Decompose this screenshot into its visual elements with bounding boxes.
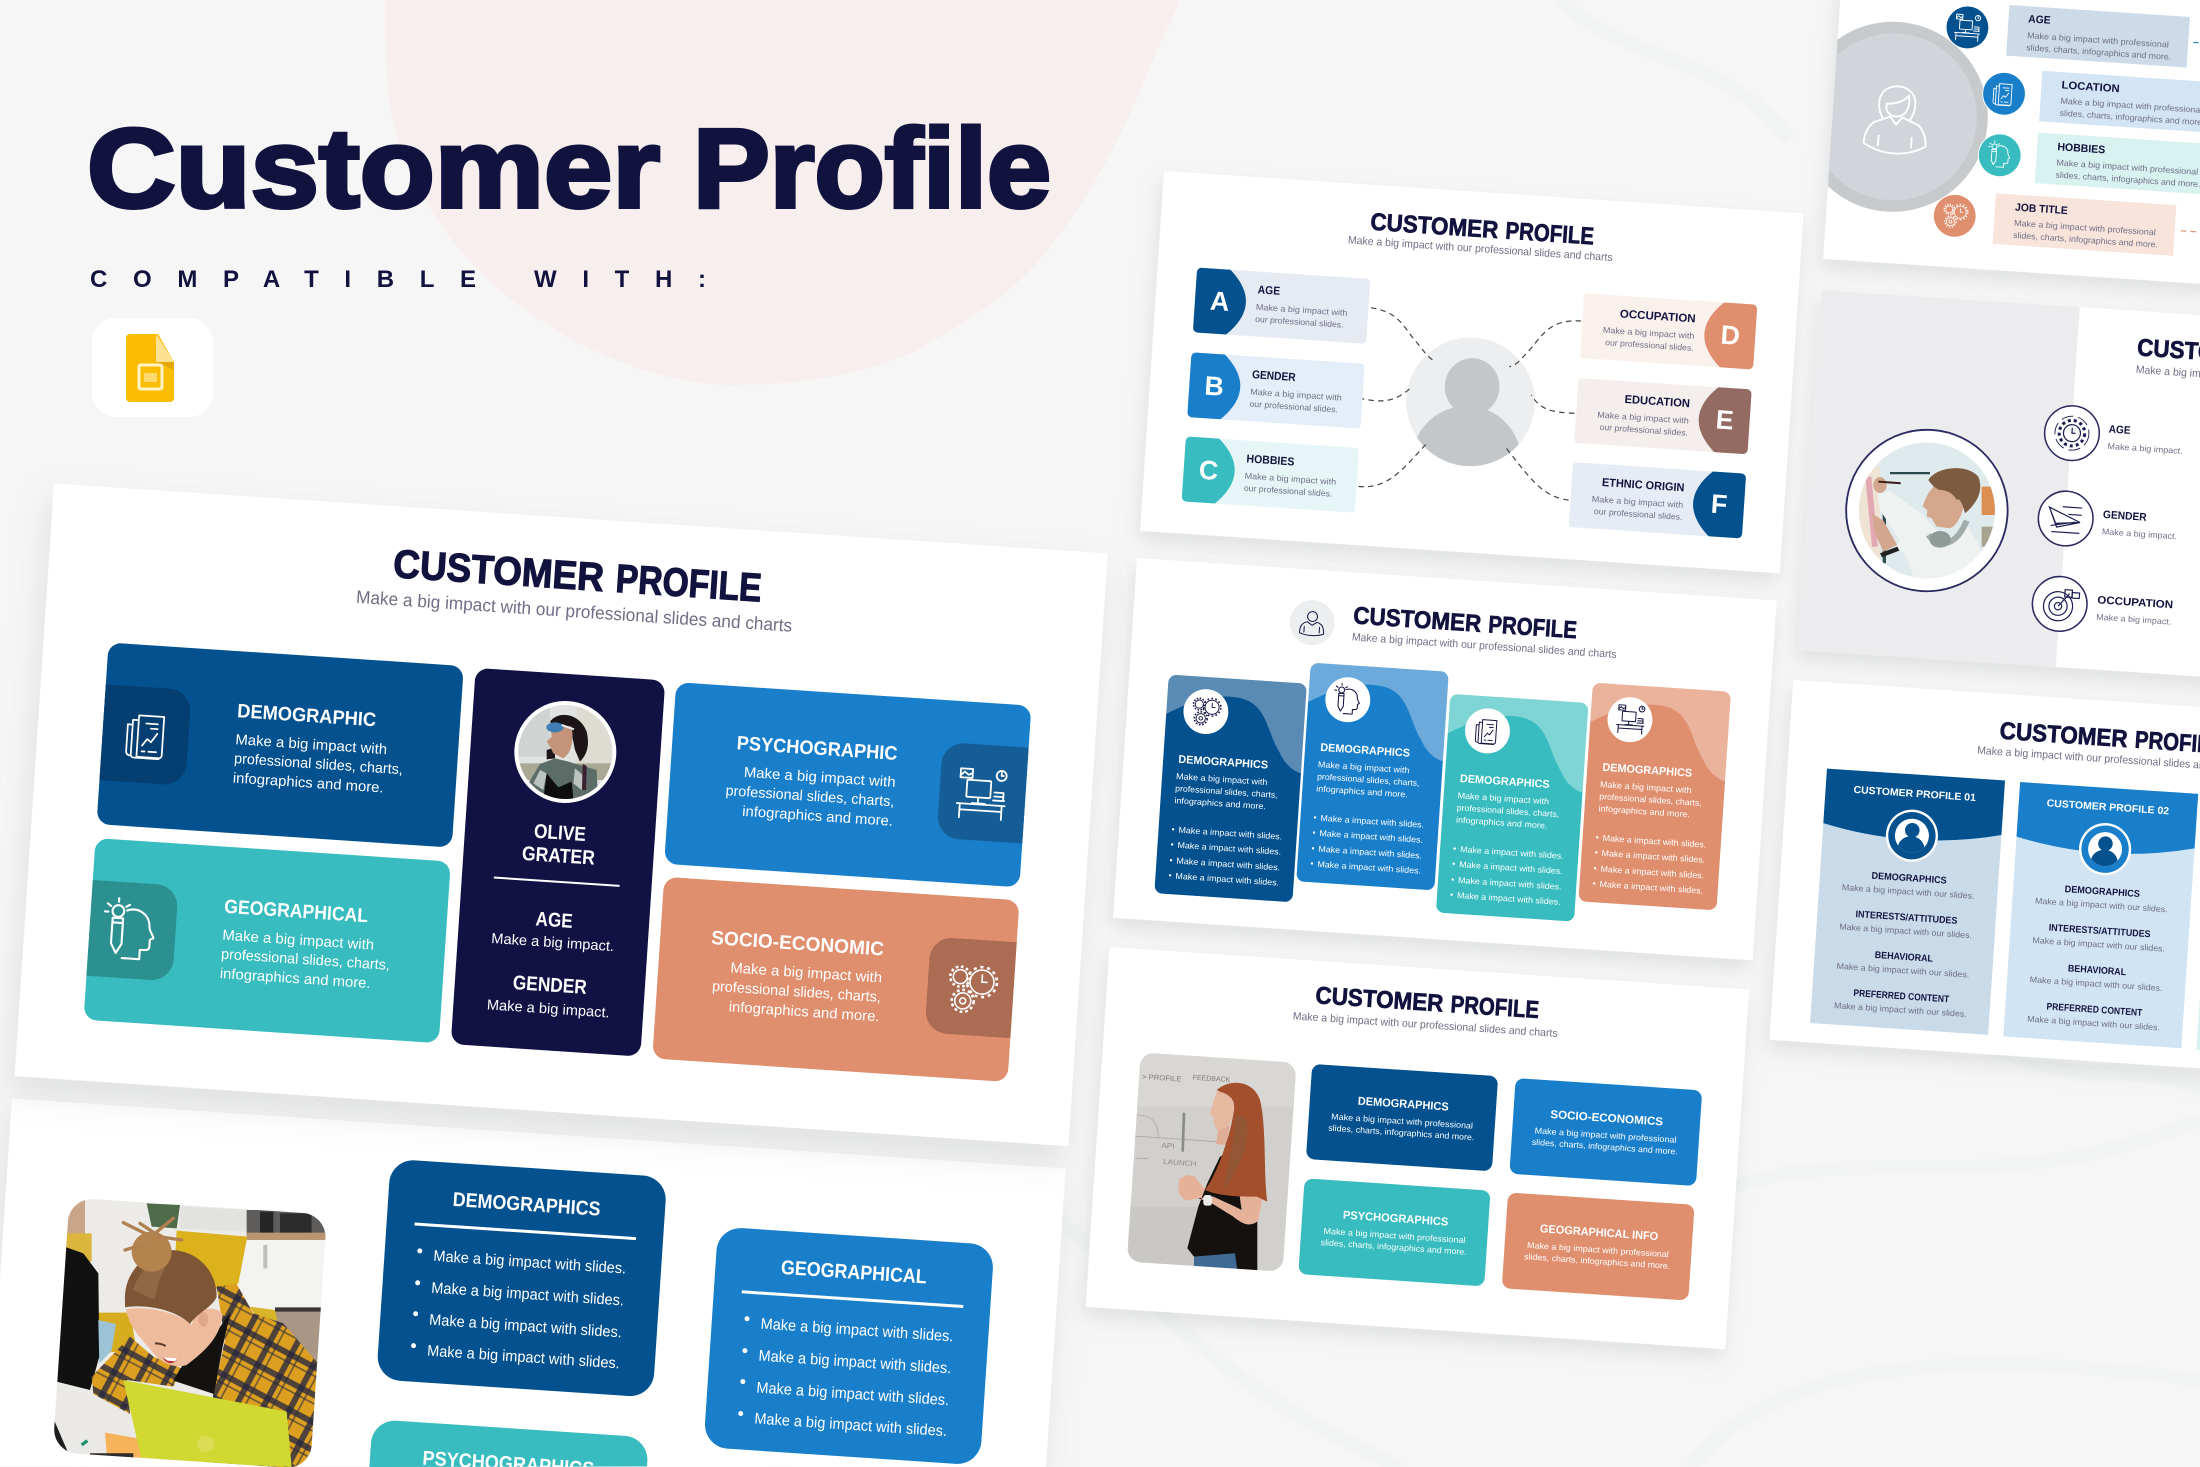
column 2: Make a impact with slides. xyxy=(1320,813,1424,830)
item F: our professional slides. xyxy=(1594,506,1683,522)
card: geographical: Make a big impact with xyxy=(222,928,375,954)
item: hobbies: HOBBIES xyxy=(2057,141,2106,156)
icon: header person xyxy=(1288,599,1336,646)
column 1: Make a impact with slides. xyxy=(1175,871,1279,888)
item F xyxy=(1569,462,1746,538)
column 3 xyxy=(1436,694,1588,922)
item B: B xyxy=(1204,371,1225,402)
card: psychographics: slides, charts, infographics and more. xyxy=(1320,1237,1467,1257)
column 4: Make a impact with slides. xyxy=(1601,848,1706,865)
item B xyxy=(1187,352,1365,429)
card: psychographics: PSYCHOGRAPHICS xyxy=(1343,1210,1449,1229)
card: persona Olive Grater: AGE xyxy=(535,908,573,933)
profile card 02: PREFERRED CONTENT xyxy=(2046,1002,2143,1019)
dashed connectors xyxy=(2181,42,2200,233)
item: job title: JOB TITLE xyxy=(2015,202,2068,217)
column 4: Make a impact with slides. xyxy=(1602,833,1707,850)
column 3: Make a impact with slides. xyxy=(1458,875,1562,892)
panel: slide 7 split with photo xyxy=(1798,290,2200,692)
profile card 03 xyxy=(2196,795,2200,1062)
card: psychographics xyxy=(1298,1178,1491,1286)
column 2: Make a impact with slides. xyxy=(1317,859,1421,876)
profile card 02: DEMOGRAPHICS xyxy=(2064,884,2141,900)
heading: PROFILE xyxy=(1488,611,1578,644)
card: geographical: infographics and more. xyxy=(219,966,371,992)
item D: OCCUPATION xyxy=(1619,308,1696,325)
item: occupation: Make a big impact. xyxy=(2096,612,2172,627)
card: demographic: Make a big impact with xyxy=(235,732,388,758)
column 1: Make a impact with slides. xyxy=(1178,825,1282,842)
profile card 01: Make a big impact with our slides. xyxy=(1834,1000,1967,1019)
column 4: professional slides, charts, xyxy=(1599,791,1702,808)
card: psychographics xyxy=(369,1419,649,1467)
item F: Make a big impact with xyxy=(1591,494,1684,510)
card: geographical info xyxy=(1502,1192,1695,1301)
compatible with label: COMPATIBLE WITH: xyxy=(90,266,706,293)
item: location: slides, charts, infographics and more. xyxy=(2059,108,2200,127)
column 2 xyxy=(1296,663,1449,890)
item: gender: Make a big impact. xyxy=(2102,526,2177,541)
column 3: infographics and more. xyxy=(1456,815,1548,831)
profile card 02: Make a big impact with our slides. xyxy=(2035,896,2168,914)
card: persona Olive Grater: Make a big impact. xyxy=(486,997,610,1021)
card: socio-economics: Make a big impact with professional xyxy=(1534,1125,1677,1145)
column 1: DEMOGRAPHICS xyxy=(1178,754,1269,772)
item E: EDUCATION xyxy=(1624,394,1690,410)
column 2: Make a impact with slides. xyxy=(1319,828,1423,845)
card: socio-economics: slides, charts, infographics and more. xyxy=(1531,1137,1678,1156)
item: location xyxy=(1981,67,2200,134)
item: age: AGE xyxy=(2108,424,2131,437)
profile card 02: Make a big impact with our slides. xyxy=(2030,974,2163,993)
column 3: Make a impact with slides. xyxy=(1459,859,1563,876)
column 2: infographics and more. xyxy=(1316,783,1408,799)
card: demographic xyxy=(97,642,464,848)
heading: CUSTOMER xyxy=(1370,209,1500,244)
card: geographical: Make a big impact with slides. xyxy=(756,1379,950,1409)
subtitle: Make a big impact with our professional slides and charts xyxy=(1352,631,1618,661)
profile card 01: PREFERRED CONTENT xyxy=(1853,988,1950,1005)
column 4: DEMOGRAPHICS xyxy=(1602,762,1693,780)
heading xyxy=(1352,602,1578,644)
item: job title: slides, charts, infographics and more. xyxy=(2013,230,2158,250)
profile card 01: Make a big impact with our slides. xyxy=(1842,882,1975,901)
panel: slide 5 demographics bullets xyxy=(0,1098,1066,1467)
photo: portrait xyxy=(518,705,612,799)
card: psychographic: PSYCHOGRAPHIC xyxy=(736,732,898,765)
profile card 01: Make a big impact with our slides. xyxy=(1839,921,1972,940)
card: demographics: DEMOGRAPHICS xyxy=(1357,1096,1449,1114)
card: demographics: Make a big impact with professional xyxy=(1331,1111,1473,1131)
card: psychographic xyxy=(664,682,1031,887)
background swirl lines xyxy=(1040,0,2200,1467)
item C xyxy=(1182,436,1359,513)
profile card 01: CUSTOMER PROFILE 01 xyxy=(1853,785,1976,804)
item: job title: Make a big impact with professional xyxy=(2014,218,2156,237)
card: demographics: Make a big impact with slides. xyxy=(433,1248,627,1278)
column 3: Make a impact with slides. xyxy=(1457,890,1561,907)
card: persona Olive Grater: OLIVE xyxy=(533,821,587,846)
photo: woman with laptop xyxy=(54,1199,326,1467)
item A: A xyxy=(1209,286,1230,317)
card: geographical xyxy=(84,838,451,1043)
item E: E xyxy=(1715,404,1735,436)
item B: our professional slides. xyxy=(1249,399,1338,414)
column 1 xyxy=(1154,674,1307,902)
card: geographical info: GEOGRAPHICAL INFO xyxy=(1540,1223,1659,1243)
card: persona Olive Grater xyxy=(451,668,665,1057)
item: age: Make a big impact. xyxy=(2107,441,2183,456)
item: age: Make a big impact with professional xyxy=(2027,30,2169,50)
icon: google slides xyxy=(92,318,213,417)
item C: our professional slides. xyxy=(1244,483,1333,499)
heading: CUSTOMER xyxy=(1999,718,2129,753)
card: socio-economic xyxy=(652,877,1019,1082)
card: socio-economic: Make a big impact with xyxy=(730,960,883,986)
column 2: DEMOGRAPHICS xyxy=(1320,742,1411,760)
chart: central person xyxy=(1406,338,1535,466)
heading xyxy=(1999,718,2200,760)
profile card 02: BEHAVIORAL xyxy=(2068,963,2127,978)
connector lines xyxy=(1349,306,1591,501)
card: geographical: professional slides, charts, xyxy=(221,947,390,974)
subtitle: Make a big impact with our professional slides and charts xyxy=(355,587,793,636)
background pink blob xyxy=(385,0,1180,385)
card: geographical: GEOGRAPHICAL xyxy=(780,1257,927,1288)
card: socio-economics: SOCIO-ECONOMICS xyxy=(1550,1109,1664,1129)
item B: GENDER xyxy=(1252,369,1297,384)
card: demographics xyxy=(376,1159,667,1398)
chart: big person circle xyxy=(1828,22,1988,212)
card: geographical: Make a big impact with slides. xyxy=(760,1316,954,1345)
column 4 xyxy=(1578,683,1731,910)
card: demographic: DEMOGRAPHIC xyxy=(237,700,377,731)
item: occupation xyxy=(2031,575,2175,639)
item E: Make a big impact with xyxy=(1597,410,1689,426)
photo: woman at whiteboard: API xyxy=(1161,1141,1175,1151)
card: demographics: Make a big impact with slides. xyxy=(429,1312,622,1341)
panel: slide 2 A to F xyxy=(1140,171,1804,573)
heading xyxy=(1315,982,1540,1024)
card: socio-economic: professional slides, charts, xyxy=(712,979,881,1006)
column 1: Make a impact with slides. xyxy=(1177,840,1281,857)
column 4: Make a big impact with xyxy=(1600,779,1692,795)
column 2: Make a big impact with xyxy=(1318,759,1410,775)
panel: slide 1 main customer profile xyxy=(15,484,1108,1146)
panel: slide 6 top right radial list xyxy=(1788,0,2200,301)
card: geographical: GEOGRAPHICAL xyxy=(224,896,369,927)
heading: CUSTOMER xyxy=(1352,602,1482,638)
profile card 02: CUSTOMER PROFILE 02 xyxy=(2046,798,2170,817)
item E xyxy=(1574,378,1752,454)
card: socio-economics xyxy=(1509,1078,1702,1186)
column 1: professional slides, charts, xyxy=(1175,783,1278,800)
profile card 01 xyxy=(1810,769,2005,1035)
heading: CUSTOMER xyxy=(392,542,605,600)
item: occupation: OCCUPATION xyxy=(2097,594,2174,611)
item: gender: GENDER xyxy=(2103,509,2147,524)
item A: Make a big impact with xyxy=(1256,302,1348,318)
column 1: Make a impact with slides. xyxy=(1176,856,1280,872)
panel: slide 4 photo and four cards xyxy=(1086,947,1749,1349)
profile card 01: DEMOGRAPHICS xyxy=(1871,871,1947,887)
column 4: Make a impact with slides. xyxy=(1599,879,1703,896)
item D: Make a big impact with xyxy=(1603,325,1695,341)
photo: woman at whiteboard: LAUNCH xyxy=(1163,1157,1197,1168)
column 3: Make a big impact with xyxy=(1457,790,1550,806)
card: socio-economic: infographics and more. xyxy=(728,999,880,1025)
card: demographics: Make a big impact with slides. xyxy=(427,1343,620,1372)
item F: ETHNIC ORIGIN xyxy=(1602,477,1685,494)
panel: slide 8 profile comparison xyxy=(1769,680,2200,1082)
column 2: professional slides, charts, xyxy=(1317,771,1420,788)
item: gender xyxy=(2037,489,2180,553)
heading: PROFILE xyxy=(1450,991,1540,1024)
item A: AGE xyxy=(1257,284,1281,298)
photo: woman at whiteboard: > PROFILE xyxy=(1142,1072,1182,1084)
subtitle: Make a big impact with our professional slides and charts xyxy=(1348,234,1614,264)
photo: woman at whiteboard xyxy=(1128,1053,1296,1271)
photo: woman at whiteboard: FEEDBACK xyxy=(1193,1073,1231,1084)
item C: C xyxy=(1198,455,1219,486)
main title xyxy=(87,106,1051,231)
card: psychographic: professional slides, charts, xyxy=(725,783,895,810)
column 4: infographics and more. xyxy=(1598,803,1690,819)
heading: PROFILE xyxy=(614,557,763,611)
card: demographic: infographics and more. xyxy=(232,771,384,796)
item: age xyxy=(2043,404,2185,468)
column 3: DEMOGRAPHICS xyxy=(1460,773,1550,791)
main title: Profile xyxy=(693,106,1051,231)
item: job title xyxy=(1931,189,2176,256)
item: age: AGE xyxy=(2028,13,2051,27)
column 3: Make a impact with slides. xyxy=(1460,844,1564,861)
heading xyxy=(1370,209,1595,251)
card: geographical: Make a big impact with slides. xyxy=(758,1348,952,1377)
item: hobbies: slides, charts, infographics and more. xyxy=(2055,169,2200,189)
item: hobbies: Make a big impact with professional xyxy=(2056,157,2199,177)
item: age: slides, charts, infographics and more. xyxy=(2026,42,2171,62)
card: demographic: professional slides, charts, xyxy=(234,751,403,778)
item A: our professional slides. xyxy=(1255,314,1344,330)
card: demographics: DEMOGRAPHICS xyxy=(452,1189,601,1221)
card: geographical xyxy=(703,1227,994,1465)
card: psychographics: Make a big impact with professional xyxy=(1323,1226,1466,1245)
item D xyxy=(1580,293,1757,370)
photo: man at board xyxy=(1841,425,2013,596)
item A xyxy=(1193,267,1370,344)
card: socio-economic: SOCIO-ECONOMIC xyxy=(711,927,885,961)
card: geographical info: Make a big impact with professional xyxy=(1527,1240,1669,1259)
card: demographics: Make a big impact with slides. xyxy=(431,1280,624,1309)
column 1: infographics and more. xyxy=(1174,795,1266,811)
card: demographics xyxy=(1306,1064,1498,1171)
card: psychographic: Make a big impact with xyxy=(743,765,896,791)
profile card 01: Make a big impact with our slides. xyxy=(1836,961,1970,980)
panel: slide 3 four columns xyxy=(1113,558,1777,960)
heading xyxy=(392,542,763,611)
card: persona Olive Grater: GRATER xyxy=(521,843,596,870)
profile card 01: INTERESTS/ATTITUDES xyxy=(1855,909,1958,927)
subtitle: Make a big impact with our professional slides and charts xyxy=(1292,1010,1558,1040)
heading: PROFILE xyxy=(1505,218,1595,251)
item: location: Make a big impact with professional xyxy=(2060,96,2200,115)
item C: Make a big impact with xyxy=(1244,471,1337,487)
profile card 02 xyxy=(2003,782,2198,1048)
profile card 02: Make a big impact with our slides. xyxy=(2032,935,2165,954)
item C: HOBBIES xyxy=(1246,453,1295,469)
card: geographical: Make a big impact with slides. xyxy=(754,1410,948,1440)
item D: D xyxy=(1720,320,1741,351)
profile card 01: BEHAVIORAL xyxy=(1874,950,1933,965)
item: location: LOCATION xyxy=(2061,79,2120,95)
item D: our professional slides. xyxy=(1605,337,1694,353)
heading: CUSTOMER xyxy=(1315,982,1445,1018)
item: age xyxy=(1944,1,2190,68)
profile card 02: INTERESTS/ATTITUDES xyxy=(2048,923,2151,940)
column 1: Make a big impact with xyxy=(1176,771,1268,787)
column 3: professional slides, charts, xyxy=(1457,802,1560,819)
card: geographical info: slides, charts, infographics and more. xyxy=(1524,1251,1671,1271)
item F: F xyxy=(1710,489,1728,520)
item E: our professional slides. xyxy=(1599,422,1688,438)
column 2: Make a impact with slides. xyxy=(1318,844,1422,861)
item: hobbies xyxy=(1976,129,2200,196)
card: psychographic: infographics and more. xyxy=(742,804,893,830)
card: persona Olive Grater: GENDER xyxy=(512,972,588,999)
profile card 02: Make a big impact with our slides. xyxy=(2027,1014,2160,1032)
item B: Make a big impact with xyxy=(1250,387,1342,403)
main title: Customer xyxy=(87,106,660,231)
card: persona Olive Grater: Make a big impact. xyxy=(491,931,615,955)
column 4: Make a impact with slides. xyxy=(1600,864,1705,881)
card: demographics: slides, charts, infographics and more. xyxy=(1328,1123,1475,1142)
